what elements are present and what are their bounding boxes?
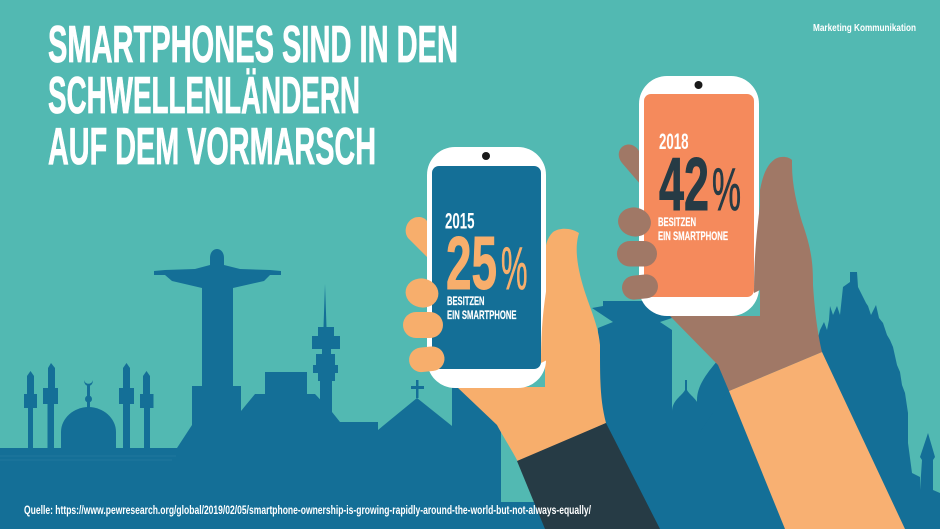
source line: Quelle: https://www.pewresearch.org/global/2019/02/05/smartphone-ownership-is-growing-rapidly-around-the-world-but-not-always-equally/: [24, 505, 592, 517]
hand: right: [670, 157, 822, 391]
stat text: 2015: [445, 208, 528, 322]
temple and right ground: [700, 272, 940, 529]
back finger: left: [406, 217, 430, 260]
figure 42: 42: [659, 142, 709, 226]
statue of Christ: [154, 249, 281, 386]
label besitzen: BESITZEN: [658, 215, 696, 229]
label besitzen: BESITZEN: [447, 294, 484, 308]
ground and central buildings: [0, 372, 600, 529]
church cross: [411, 380, 424, 398]
year 2015: 2015: [445, 208, 474, 234]
title line 3: AUF DEM VORMARSCH: [48, 118, 376, 176]
phone: left: [427, 147, 546, 388]
pagoda tower: [592, 301, 700, 529]
sleeve: left: [517, 423, 660, 529]
year 2018: 2018: [659, 129, 688, 154]
stat text: 2018: [658, 129, 741, 243]
percent sign: %: [712, 156, 741, 223]
camera: left: [482, 152, 490, 160]
camera: right: [694, 81, 702, 89]
text: %: [501, 235, 528, 302]
fingers: left: [403, 275, 446, 373]
small domed tower: [672, 380, 700, 432]
sleeve: right: [729, 352, 905, 529]
skyline silhouette: [0, 249, 940, 529]
title: [48, 16, 458, 176]
hand: left: [457, 229, 606, 462]
palm overlap: left: [541, 285, 547, 363]
screen: right: [644, 94, 754, 297]
title line 1: SMARTPHONES SIND IN DEN: [48, 16, 458, 74]
television tower: [312, 284, 340, 420]
onion dome: [697, 360, 760, 529]
brand label: Marketing Kommunikation: [813, 23, 916, 34]
ground stripes: [0, 456, 176, 460]
screen: left: [432, 166, 541, 369]
title line 2: SCHWELLENLÄNDERN: [48, 67, 360, 125]
label ein smartphone: EIN SMARTPHONE: [447, 308, 516, 322]
fingers: right: [615, 204, 659, 301]
label ein smartphone: EIN SMARTPHONE: [658, 229, 728, 243]
figure 25: 25: [446, 221, 497, 305]
phone: right: [639, 76, 759, 316]
mosque: [24, 363, 154, 448]
back finger: right: [619, 144, 641, 185]
palm overlap: right: [754, 205, 760, 293]
